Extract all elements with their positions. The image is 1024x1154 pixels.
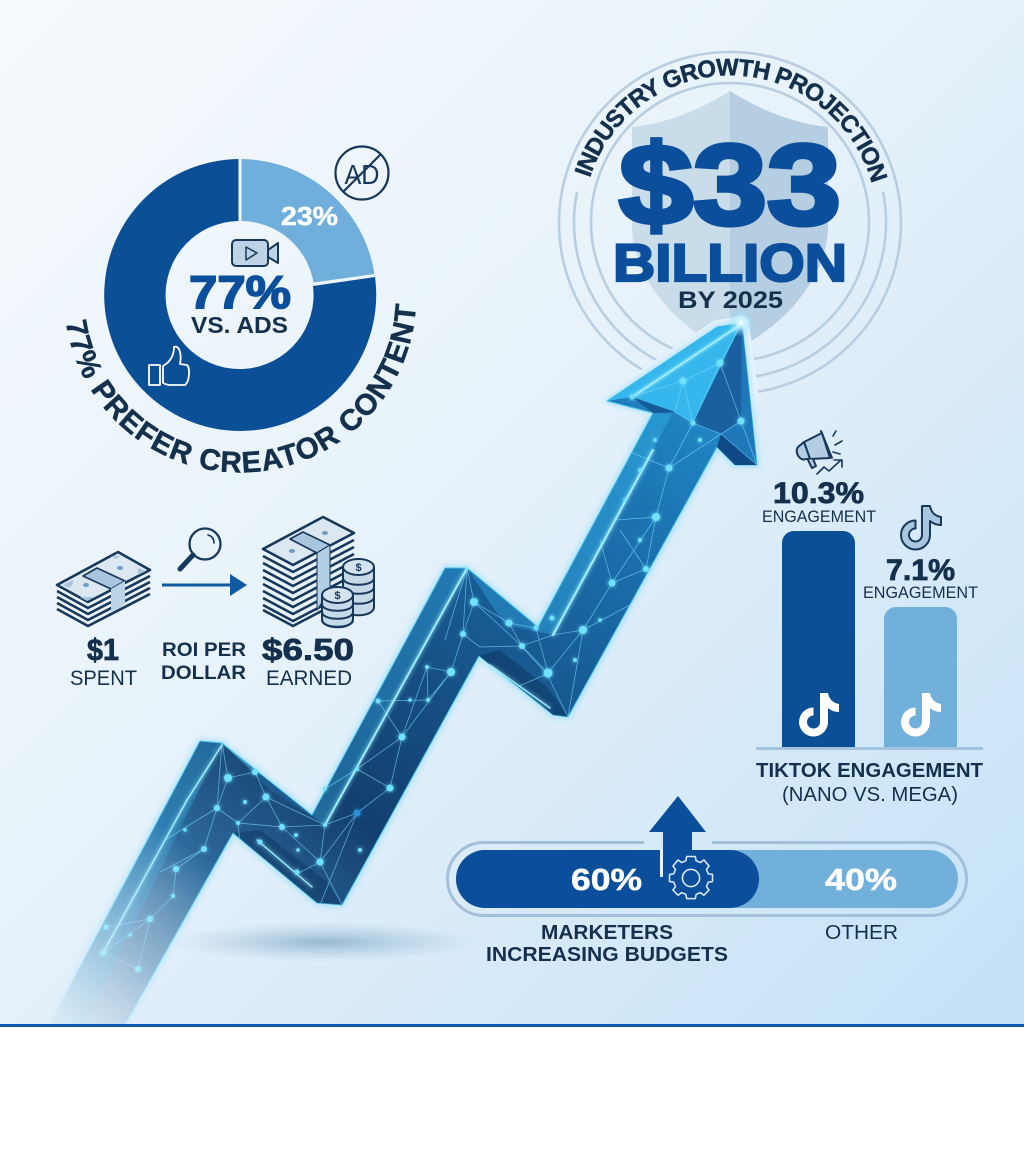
center value: 77% <box>189 266 291 318</box>
icon: no ads: AD <box>344 159 380 190</box>
year label: BY 2025 <box>678 287 783 314</box>
icon: megaphone <box>797 431 842 474</box>
icon: small money stack <box>57 552 150 626</box>
icon: tiktok outline <box>901 506 941 550</box>
nano value: 10.3% <box>773 477 864 510</box>
icon: magnifier <box>180 528 220 569</box>
mega value: 7.1% <box>886 554 955 587</box>
spent value: $1 <box>87 632 119 667</box>
label: marketers: INCREASING BUDGETS <box>486 944 728 966</box>
big number: $33 <box>619 122 841 249</box>
curved caption: 77% PREFER CREATOR CONTENT <box>66 303 416 473</box>
roi label <box>161 640 246 684</box>
icon: coins: $ <box>355 562 362 574</box>
label: marketers <box>486 922 728 966</box>
progress pill <box>448 842 966 916</box>
icon: gear <box>670 856 712 899</box>
icon: thumbs up <box>149 347 189 385</box>
panel: tiktok engagement <box>756 431 983 806</box>
icon: shield <box>632 91 828 352</box>
panel: roi per dollar <box>57 517 374 690</box>
panel: donut chart <box>66 145 416 473</box>
icon: large money stack <box>263 517 354 626</box>
center caption: VS. ADS <box>191 312 288 338</box>
footer rule <box>0 1024 1024 1027</box>
arrow: up <box>649 796 706 877</box>
icon: coins <box>322 559 374 627</box>
bright ridge lines <box>103 325 740 953</box>
bar: mega <box>884 607 957 747</box>
earned value: $6.50 <box>262 632 354 667</box>
icon: coins: $ <box>334 590 341 602</box>
panel: industry growth projection <box>558 50 902 393</box>
arrow: growth line <box>50 323 757 1024</box>
bar: nano <box>782 531 855 747</box>
spent caption: SPENT <box>70 667 137 690</box>
arrow: roi <box>162 574 247 596</box>
value: 60 percent: 60% <box>571 862 642 897</box>
panel: marketer budgets <box>448 796 966 966</box>
curved heading: INDUSTRY GROWTH PROJECTION <box>574 58 888 182</box>
arrow tip glow <box>727 309 755 337</box>
arrow shadow <box>170 922 480 962</box>
chart title: TIKTOK ENGAGEMENT <box>756 760 983 782</box>
label: other: OTHER <box>825 922 898 944</box>
label: marketers: MARKETERS <box>541 922 673 944</box>
value: 40 percent: 40% <box>825 862 897 897</box>
roi label: DOLLAR <box>161 663 246 684</box>
mesh lines <box>103 323 757 969</box>
slice label: 23% <box>281 201 338 231</box>
chart subtitle: (NANO VS. MEGA) <box>782 784 958 806</box>
mega caption: ENGAGEMENT <box>863 584 978 602</box>
concentric rings <box>559 52 901 394</box>
billion label: BILLION <box>613 234 847 293</box>
donut chart <box>104 159 376 431</box>
roi label: ROI PER <box>162 640 246 661</box>
mesh nodes <box>100 360 744 972</box>
nano caption: ENGAGEMENT <box>762 508 876 526</box>
icon: no ads <box>336 146 388 200</box>
icon: video camera <box>232 240 278 266</box>
earned caption: EARNED <box>266 667 352 690</box>
halo around arrow head <box>607 323 752 410</box>
